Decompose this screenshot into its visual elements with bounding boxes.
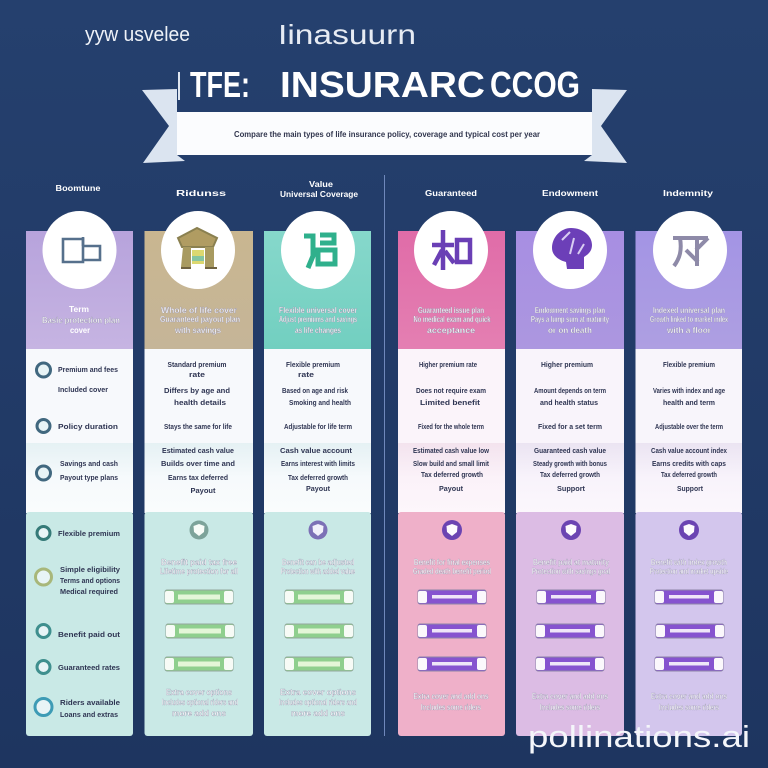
- footer text: more add ons: [172, 709, 227, 718]
- indicator pills: [655, 590, 724, 671]
- icon: purple glyph: [432, 230, 470, 270]
- icon: building: [178, 228, 217, 269]
- header description: as life changes: [295, 326, 341, 335]
- row text: Slow build and small limit: [413, 459, 489, 468]
- indicator pills: [418, 590, 486, 671]
- footer text: Extra cover and add ons: [414, 692, 489, 701]
- row labels: [58, 365, 121, 719]
- row text: [161, 360, 235, 495]
- indicator pills: [536, 590, 605, 671]
- lower text: [650, 558, 728, 576]
- row text: Stays the same for life: [164, 422, 232, 431]
- row text: Fixed for a set term: [538, 422, 602, 431]
- lower text: Benefit for final expenses: [414, 558, 490, 567]
- row text: [533, 360, 607, 493]
- row text: rate: [189, 370, 205, 379]
- header description: Guaranteed payout plan: [160, 315, 240, 324]
- white rows: [636, 349, 742, 443]
- header description: [650, 306, 728, 335]
- row text: [651, 360, 728, 493]
- panel: column 5: [516, 189, 624, 736]
- row text: Tax deferred growth: [421, 470, 483, 479]
- lower text: Lifetime protection for all: [160, 567, 238, 576]
- row text: Estimated cash value low: [413, 446, 489, 455]
- lower text: Benefit paid at maturity: [533, 558, 609, 567]
- row text: Higher premium rate: [419, 360, 477, 369]
- row text: Earns tax deferred: [168, 473, 228, 482]
- row text: Adjustable for life term: [284, 422, 352, 431]
- watermark: pollinations.ai: [528, 719, 750, 754]
- ribbon right tail: [584, 89, 627, 163]
- indicator pills: [285, 590, 353, 671]
- icon circle: [42, 211, 116, 289]
- lower text: Benefit can be adjusted: [282, 558, 354, 567]
- row labels: Payout type plans: [60, 473, 118, 482]
- row text: Based on age and risk: [282, 386, 349, 395]
- header description: [531, 306, 609, 335]
- lower block: [636, 512, 742, 736]
- column label: Indemnity: [663, 189, 714, 198]
- header description: or on death: [548, 326, 592, 335]
- header description: Growth linked to market index: [650, 315, 728, 324]
- panel: column 3: [264, 180, 371, 736]
- footer text: Extra cover options: [280, 688, 357, 697]
- brand mark text: yyw usvelee: [85, 24, 190, 46]
- row text: and health status: [540, 398, 598, 407]
- header description: Endowment savings plan: [535, 306, 605, 315]
- header block: [636, 231, 742, 349]
- ribbon left tail: [142, 89, 185, 163]
- panel: column 2: [144, 189, 253, 736]
- header description: [160, 306, 240, 335]
- header description: Term: [69, 305, 89, 314]
- divider between column groups: [384, 175, 385, 736]
- lower text: [532, 558, 610, 576]
- row text: Estimated cash value: [162, 446, 234, 455]
- row text: Standard premium: [168, 360, 227, 369]
- lower text: Protection with added value: [281, 567, 355, 576]
- row text: Payout: [439, 484, 463, 493]
- row labels: Loans and extras: [60, 710, 118, 719]
- header description: Guaranteed issue plan: [418, 306, 484, 315]
- shield badge: [561, 520, 581, 540]
- header block: [398, 231, 505, 349]
- footer text: Extra cover and add ons: [532, 692, 608, 701]
- row text: [280, 360, 355, 493]
- shield badge: [679, 520, 699, 540]
- heading: overline: Iinasuurn: [278, 19, 416, 50]
- ribbon banner: [142, 89, 627, 163]
- icon: purple head: [552, 228, 592, 269]
- row labels: Terms and options: [60, 576, 120, 585]
- panel: column 1 row labels: [26, 184, 133, 736]
- column label: [280, 180, 359, 199]
- footer text: [651, 692, 727, 712]
- row text: Cash value account index: [651, 446, 728, 455]
- row text: Does not require exam: [416, 386, 486, 395]
- footer text: Includes optional riders and: [162, 698, 238, 707]
- row text: Varies with index and age: [653, 386, 725, 395]
- footer text: Extra cover options: [166, 688, 232, 697]
- column label: Boomtune: [56, 184, 101, 193]
- icon: document windows: [63, 237, 100, 262]
- row text: Earns interest with limits: [281, 459, 355, 468]
- icon circle: [533, 211, 607, 289]
- footer text: [414, 692, 489, 712]
- row text: Adjustable over the term: [655, 422, 723, 431]
- row text: Tax deferred growth: [540, 470, 600, 479]
- row labels: Included cover: [58, 385, 108, 394]
- lower block: [26, 512, 133, 736]
- row text: Smoking and health: [289, 398, 351, 407]
- column label: Ridunss: [176, 189, 227, 198]
- lower text: [160, 558, 238, 576]
- header description: Whole of life cover: [161, 306, 237, 315]
- row text: Support: [677, 484, 703, 493]
- row text: Support: [557, 484, 585, 493]
- white rows: [264, 349, 371, 443]
- header description: Basic protection plan: [42, 316, 120, 325]
- heading: main title: CCOG: [490, 64, 580, 105]
- footer text: Includes some riders: [540, 703, 600, 712]
- row labels: Guaranteed rates: [58, 663, 120, 672]
- column label: Guaranteed: [425, 189, 477, 198]
- header description: [279, 306, 357, 335]
- row text: Cash value account: [280, 446, 353, 455]
- panel: column 6: [636, 189, 742, 736]
- lower text: Benefit paid tax free: [161, 558, 238, 567]
- lower text: Protection with savings goal: [532, 567, 610, 576]
- icon circle: [414, 211, 488, 289]
- white rows: [516, 349, 624, 443]
- row labels: Flexible premium: [58, 529, 120, 538]
- row text: Fixed for the whole term: [418, 422, 484, 431]
- header description: acceptance: [427, 326, 476, 335]
- footer text: Includes some riders: [421, 703, 481, 712]
- row labels: Savings and cash: [60, 459, 118, 468]
- panel: column 4: [398, 189, 505, 736]
- header block: [144, 231, 253, 349]
- row text: Limited benefit: [420, 398, 481, 407]
- footer text: [279, 688, 357, 718]
- ribbon white panel: [177, 112, 592, 155]
- header description: No medical exam and quick: [414, 315, 491, 324]
- lower text: Graded death benefit period: [413, 567, 491, 576]
- row text: Tax deferred growth: [661, 470, 717, 479]
- row text: Tax deferred growth: [288, 473, 348, 482]
- row text: Payout: [306, 484, 330, 493]
- icon: teal glyph: [304, 235, 335, 268]
- white rows: [144, 349, 253, 443]
- lower text: Protection and market upside: [650, 567, 728, 576]
- white rows: [398, 349, 505, 443]
- row text: Guaranteed cash value: [534, 446, 606, 455]
- icon: lilac glyph: [673, 238, 708, 266]
- column label: Universal Coverage: [280, 190, 359, 199]
- row text: rate: [298, 370, 314, 379]
- footer text: Includes optional riders and: [279, 698, 357, 707]
- ribbon subtitle: Compare the main types of life insurance policy, coverage and typical cost per year: [234, 129, 541, 139]
- row text: Earns credits with caps: [652, 459, 726, 468]
- row labels: Policy duration: [58, 422, 118, 431]
- row text: Amount depends on term: [534, 386, 606, 395]
- header block: [516, 231, 624, 349]
- header block: [264, 231, 371, 349]
- footer text: Extra cover and add ons: [651, 692, 727, 701]
- shield badge: [442, 520, 462, 540]
- icon circle: [653, 211, 727, 289]
- row text: Flexible premium: [286, 360, 340, 369]
- heading: main title: INSURARC: [280, 64, 485, 105]
- row labels: Simple eligibility: [60, 565, 121, 574]
- row text: Higher premium: [541, 360, 593, 369]
- row labels: Riders available: [60, 698, 120, 707]
- heading: main title: TFE:: [190, 64, 250, 105]
- row icons: [35, 363, 52, 716]
- lower block: [398, 512, 505, 736]
- row labels: Medical required: [60, 587, 118, 596]
- lower text: [281, 558, 355, 576]
- shield badge: [308, 520, 328, 540]
- lower text: [413, 558, 491, 576]
- row text: health details: [174, 398, 226, 407]
- row text: Steady growth with bonus: [533, 459, 607, 468]
- footer text: [532, 692, 608, 712]
- indicator pills: [165, 590, 234, 671]
- row labels: Premium and fees: [58, 365, 118, 374]
- column label: Endowment: [542, 189, 598, 198]
- header description: with a floor: [666, 326, 711, 335]
- header description: Flexible universal cover: [279, 306, 357, 315]
- icon circle: [281, 211, 355, 289]
- header block: [26, 231, 133, 349]
- header description: Indexed universal plan: [653, 306, 725, 315]
- lower text: Benefit with index growth: [651, 558, 727, 567]
- heading: main title: [178, 64, 580, 105]
- row text: Flexible premium: [663, 360, 715, 369]
- footer text: [162, 688, 238, 718]
- lower block: [264, 512, 371, 736]
- row text: [413, 360, 489, 493]
- footer text: Includes some riders: [659, 703, 719, 712]
- row text: Builds over time and: [161, 459, 235, 468]
- header description: cover: [70, 326, 90, 335]
- white rows: [26, 349, 133, 443]
- header description: [42, 305, 120, 335]
- header description: Adjust premiums and savings: [279, 315, 357, 324]
- header description: [414, 306, 491, 335]
- footer text: more add ons: [291, 709, 346, 718]
- row text: Differs by age and: [164, 386, 230, 395]
- shield badge: [190, 520, 208, 540]
- row text: health and term: [663, 398, 715, 407]
- lower block: [516, 512, 624, 736]
- icon circle: [161, 211, 235, 289]
- column label: Value: [309, 180, 334, 189]
- header description: Pays a lump sum at maturity: [531, 315, 609, 324]
- row labels: Benefit paid out: [58, 630, 121, 639]
- row text: Payout: [190, 486, 216, 495]
- header description: with savings: [174, 326, 222, 335]
- lower block: [144, 512, 253, 736]
- tinted rows: [26, 443, 133, 513]
